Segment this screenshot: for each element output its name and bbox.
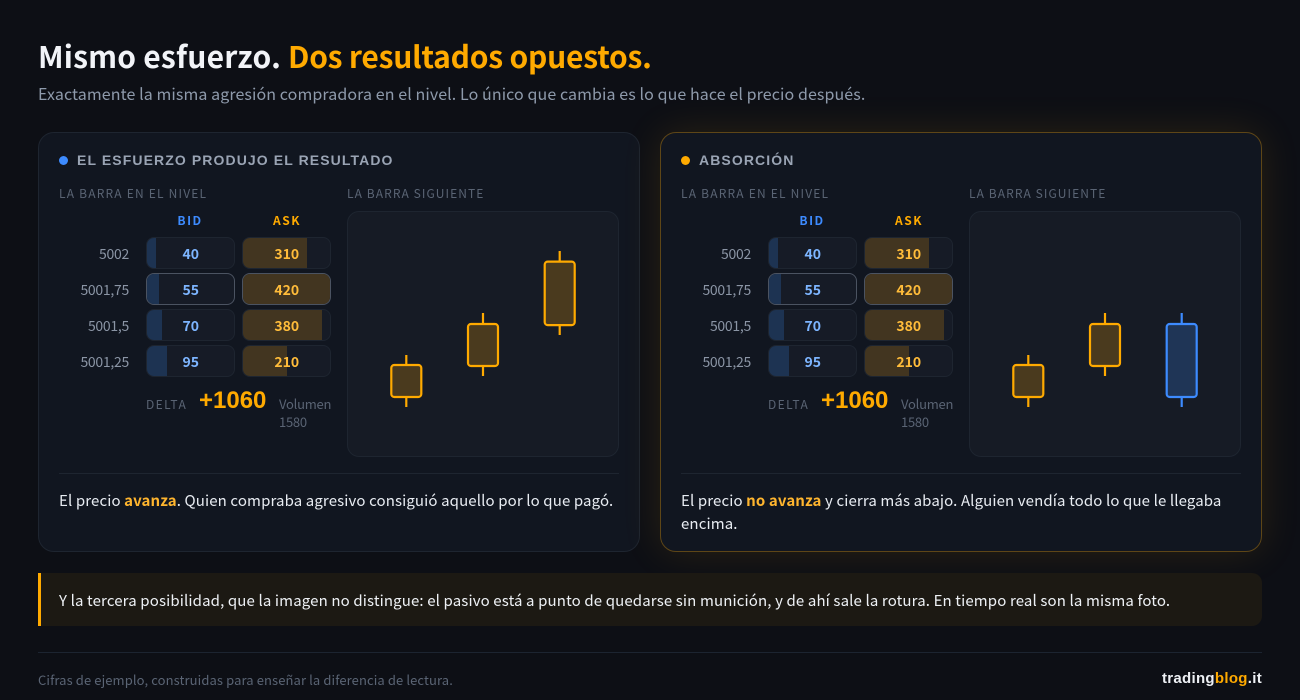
row 5002: 40 (182, 244, 199, 264)
row 5002: 310 (896, 244, 921, 264)
brand: tradingblog.it (1162, 670, 1262, 687)
row 5001,5: 5001,5 (88, 316, 129, 336)
callout: Y la tercera posibilidad, que la imagen no distingue: el pasivo está a punto de quedarse sin munición, y de ahí sale la rotura. En tiempo real son la misma foto. (59, 590, 1170, 611)
volume: Volumen 1580 (901, 394, 953, 431)
candle 2 (468, 313, 498, 376)
candle 3 (545, 251, 575, 335)
label: next bar: LA BARRA SIGUIENTE (969, 185, 1106, 202)
row 5001,75: 420 (274, 280, 299, 300)
row 5001,75: 5001,75 (702, 280, 751, 300)
panel heading: EL ESFUERZO PRODUJO EL RESULTADO (77, 152, 394, 168)
row 5001,75: 55 (182, 280, 199, 300)
row 5001,75 (702, 273, 953, 305)
row 5001,5: 380 (274, 316, 299, 336)
footer note: Cifras de ejemplo, construidas para enseñar la diferencia de lectura. (38, 670, 453, 689)
row 5002: 310 (274, 244, 299, 264)
row 5001,25 (80, 345, 331, 377)
status dot (59, 156, 68, 165)
row 5001,25 (702, 345, 953, 377)
row 5001,25: 210 (274, 352, 299, 372)
title: Mismo esfuerzo. Dos resultados opuestos. (38, 33, 652, 77)
row 5002: 5002 (99, 244, 129, 264)
row 5001,75: 5001,75 (80, 280, 129, 300)
volume: Volumen 1580 (279, 394, 331, 431)
bid header: BID (177, 212, 203, 229)
ask header: ASK (273, 212, 301, 229)
status dot (681, 156, 690, 165)
row 5001,75: 55 (804, 280, 821, 300)
row 5001,25: 210 (896, 352, 921, 372)
row 5002 (99, 237, 331, 269)
label: next bar: LA BARRA SIGUIENTE (347, 185, 484, 202)
panel: absorción (660, 132, 1262, 552)
row 5001,25: 5001,25 (702, 352, 751, 372)
row 5001,5 (88, 309, 331, 341)
panel heading: ABSORCIÓN (699, 152, 794, 168)
row 5001,5: 70 (182, 316, 199, 336)
delta label: DELTA (768, 396, 809, 413)
delta value: +1060 (821, 387, 888, 414)
row 5001,25: 5001,25 (80, 352, 129, 372)
conclusion text: El precio no avanza y cierra más abajo. Alguien vendía todo lo que le llegaba encima. (681, 490, 1221, 534)
row 5002 (721, 237, 953, 269)
row 5001,5: 70 (804, 316, 821, 336)
row 5001,25: 95 (804, 352, 821, 372)
candle 2 (1090, 313, 1120, 376)
row 5001,5: 380 (896, 316, 921, 336)
candlestick chart: price advances (347, 211, 619, 457)
row 5002: 40 (804, 244, 821, 264)
label: bar at level: LA BARRA EN EL NIVEL (59, 185, 207, 202)
candle 1 (391, 355, 421, 407)
row 5001,5 (710, 309, 953, 341)
row 5001,75: 420 (896, 280, 921, 300)
candle 3: blue (1167, 313, 1197, 407)
delta value: +1060 (199, 387, 266, 414)
row 5002: 5002 (721, 244, 751, 264)
panel: el esfuerzo produjo el resultado (38, 132, 640, 552)
candle 1 (1013, 355, 1043, 407)
subtitle: Exactamente la misma agresión compradora en el nivel. Lo único que cambia es lo que hace el precio después. (38, 81, 865, 105)
row 5001,75 (80, 273, 331, 305)
ask header: ASK (895, 212, 923, 229)
delta label: DELTA (146, 396, 187, 413)
row 5001,5: 5001,5 (710, 316, 751, 336)
bid header: BID (799, 212, 825, 229)
row 5001,25: 95 (182, 352, 199, 372)
callout (38, 573, 1262, 626)
conclusion text: El precio avanza. Quien compraba agresivo consiguió aquello por lo que pagó. (59, 490, 613, 511)
candlestick chart: price falls back (969, 211, 1241, 457)
label: bar at level: LA BARRA EN EL NIVEL (681, 185, 829, 202)
